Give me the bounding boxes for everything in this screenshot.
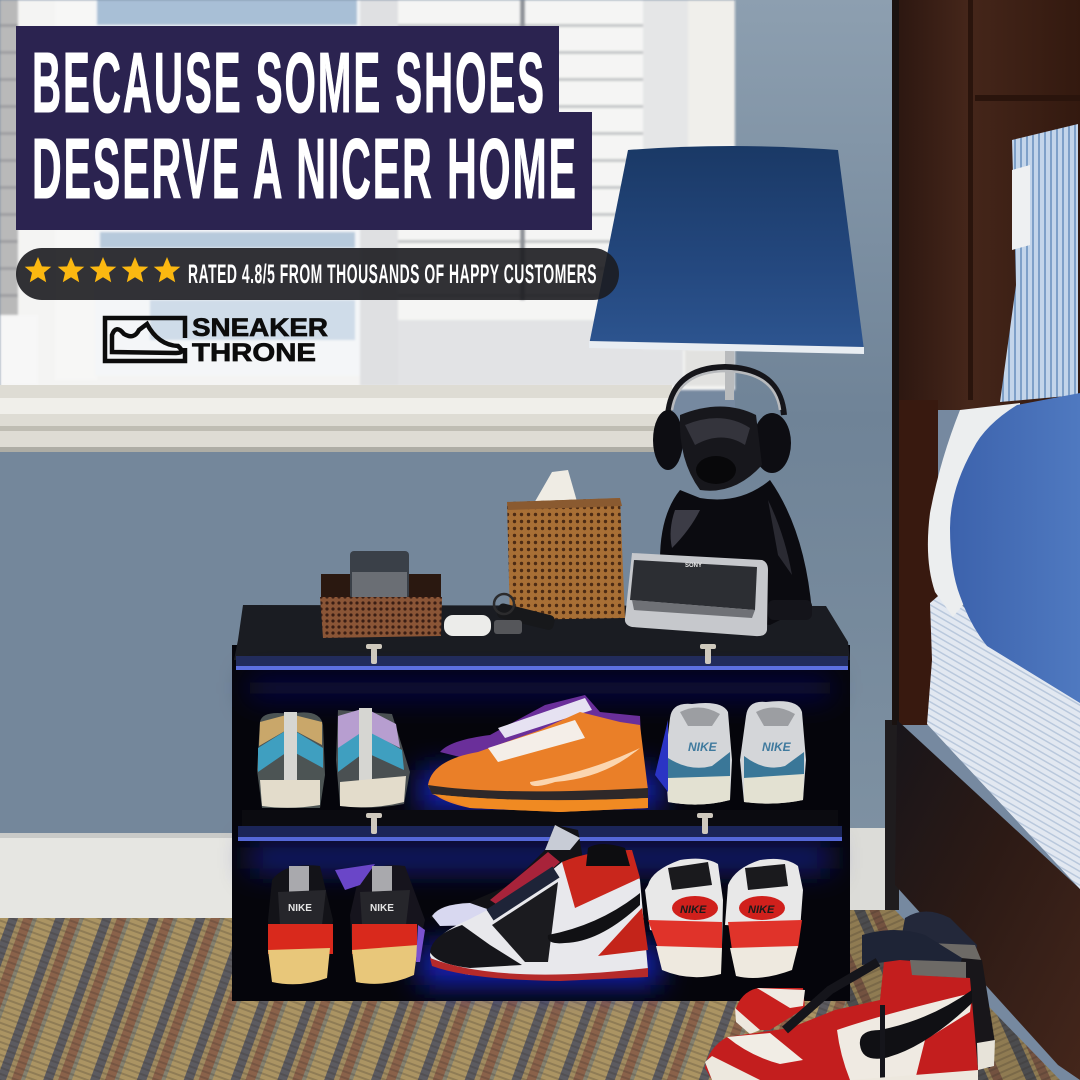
- shoe: orange low top, centre top row: [428, 695, 648, 812]
- bed frame: [895, 720, 1080, 1080]
- shoe: back high top on floor: [735, 912, 995, 1070]
- shoes: Nike red and white pair, bottom row right: [645, 859, 803, 978]
- logo: Sneaker Throne: [105, 314, 328, 367]
- icon: bulldog statue with headphones: [653, 367, 812, 625]
- window with shutters: [0, 0, 735, 390]
- shoes: Nike Air pair, top row right: [655, 701, 806, 805]
- upper acrylic door: [236, 656, 848, 670]
- door knobs: [366, 644, 716, 834]
- pillow: [1000, 124, 1078, 402]
- icon: sneaker logo mark: [105, 318, 185, 361]
- earbuds and keys: [444, 594, 556, 636]
- shoes: rainbow pair, top row left: [257, 708, 410, 808]
- title background panel: [16, 26, 592, 230]
- blue blanket: [950, 393, 1080, 703]
- blue lighting in cabinet: [250, 678, 830, 985]
- shoes: red Air Force pair, bottom row left: NIKE: [370, 903, 394, 914]
- phone in basket: [320, 551, 442, 638]
- alarm clock: SONY: [685, 563, 702, 569]
- shoes: Nike red and white pair, bottom row right: NIKE: [680, 904, 707, 916]
- headboard and bed post: [885, 0, 1080, 910]
- icon: five stars: [25, 257, 180, 282]
- logo: Sneaker Throne: THRONE: [192, 339, 316, 367]
- shoe: front high top on floor: [705, 930, 978, 1080]
- shoes: Nike Air pair, top row right: NIKE: [762, 740, 792, 754]
- shoes: Nike red and white pair, bottom row right: NIKE: [748, 904, 775, 916]
- mattress skirt: [927, 590, 1080, 889]
- table lamp: [589, 146, 864, 400]
- rating text: RATED 4.8/5 FROM THOUSANDS OF HAPPY CUSTOMERS: [188, 259, 597, 289]
- shoes: red Air Force pair, bottom row left: [268, 864, 425, 984]
- rating bar: [16, 248, 619, 300]
- shoes: Nike Air pair, top row right: NIKE: [688, 740, 718, 754]
- window sill: [0, 385, 672, 452]
- baseboard: [0, 828, 886, 918]
- white sheet: [928, 403, 1020, 617]
- title: [32, 36, 578, 217]
- alarm clock: [625, 553, 768, 636]
- shoe: rear high top, centre bottom row: [430, 825, 590, 928]
- shoe cabinet: [232, 605, 850, 1001]
- carpet: [0, 910, 1060, 1080]
- lower acrylic door: [238, 826, 842, 841]
- shoe: black and red high top, centre bottom row: [430, 844, 648, 981]
- tissue box: [507, 470, 625, 620]
- shoes: red Air Force pair, bottom row left: NIKE: [288, 903, 312, 914]
- logo wordmark: SNEAKER: [192, 314, 328, 342]
- bed with pillow, sheet, mattress, blanket: [927, 124, 1080, 889]
